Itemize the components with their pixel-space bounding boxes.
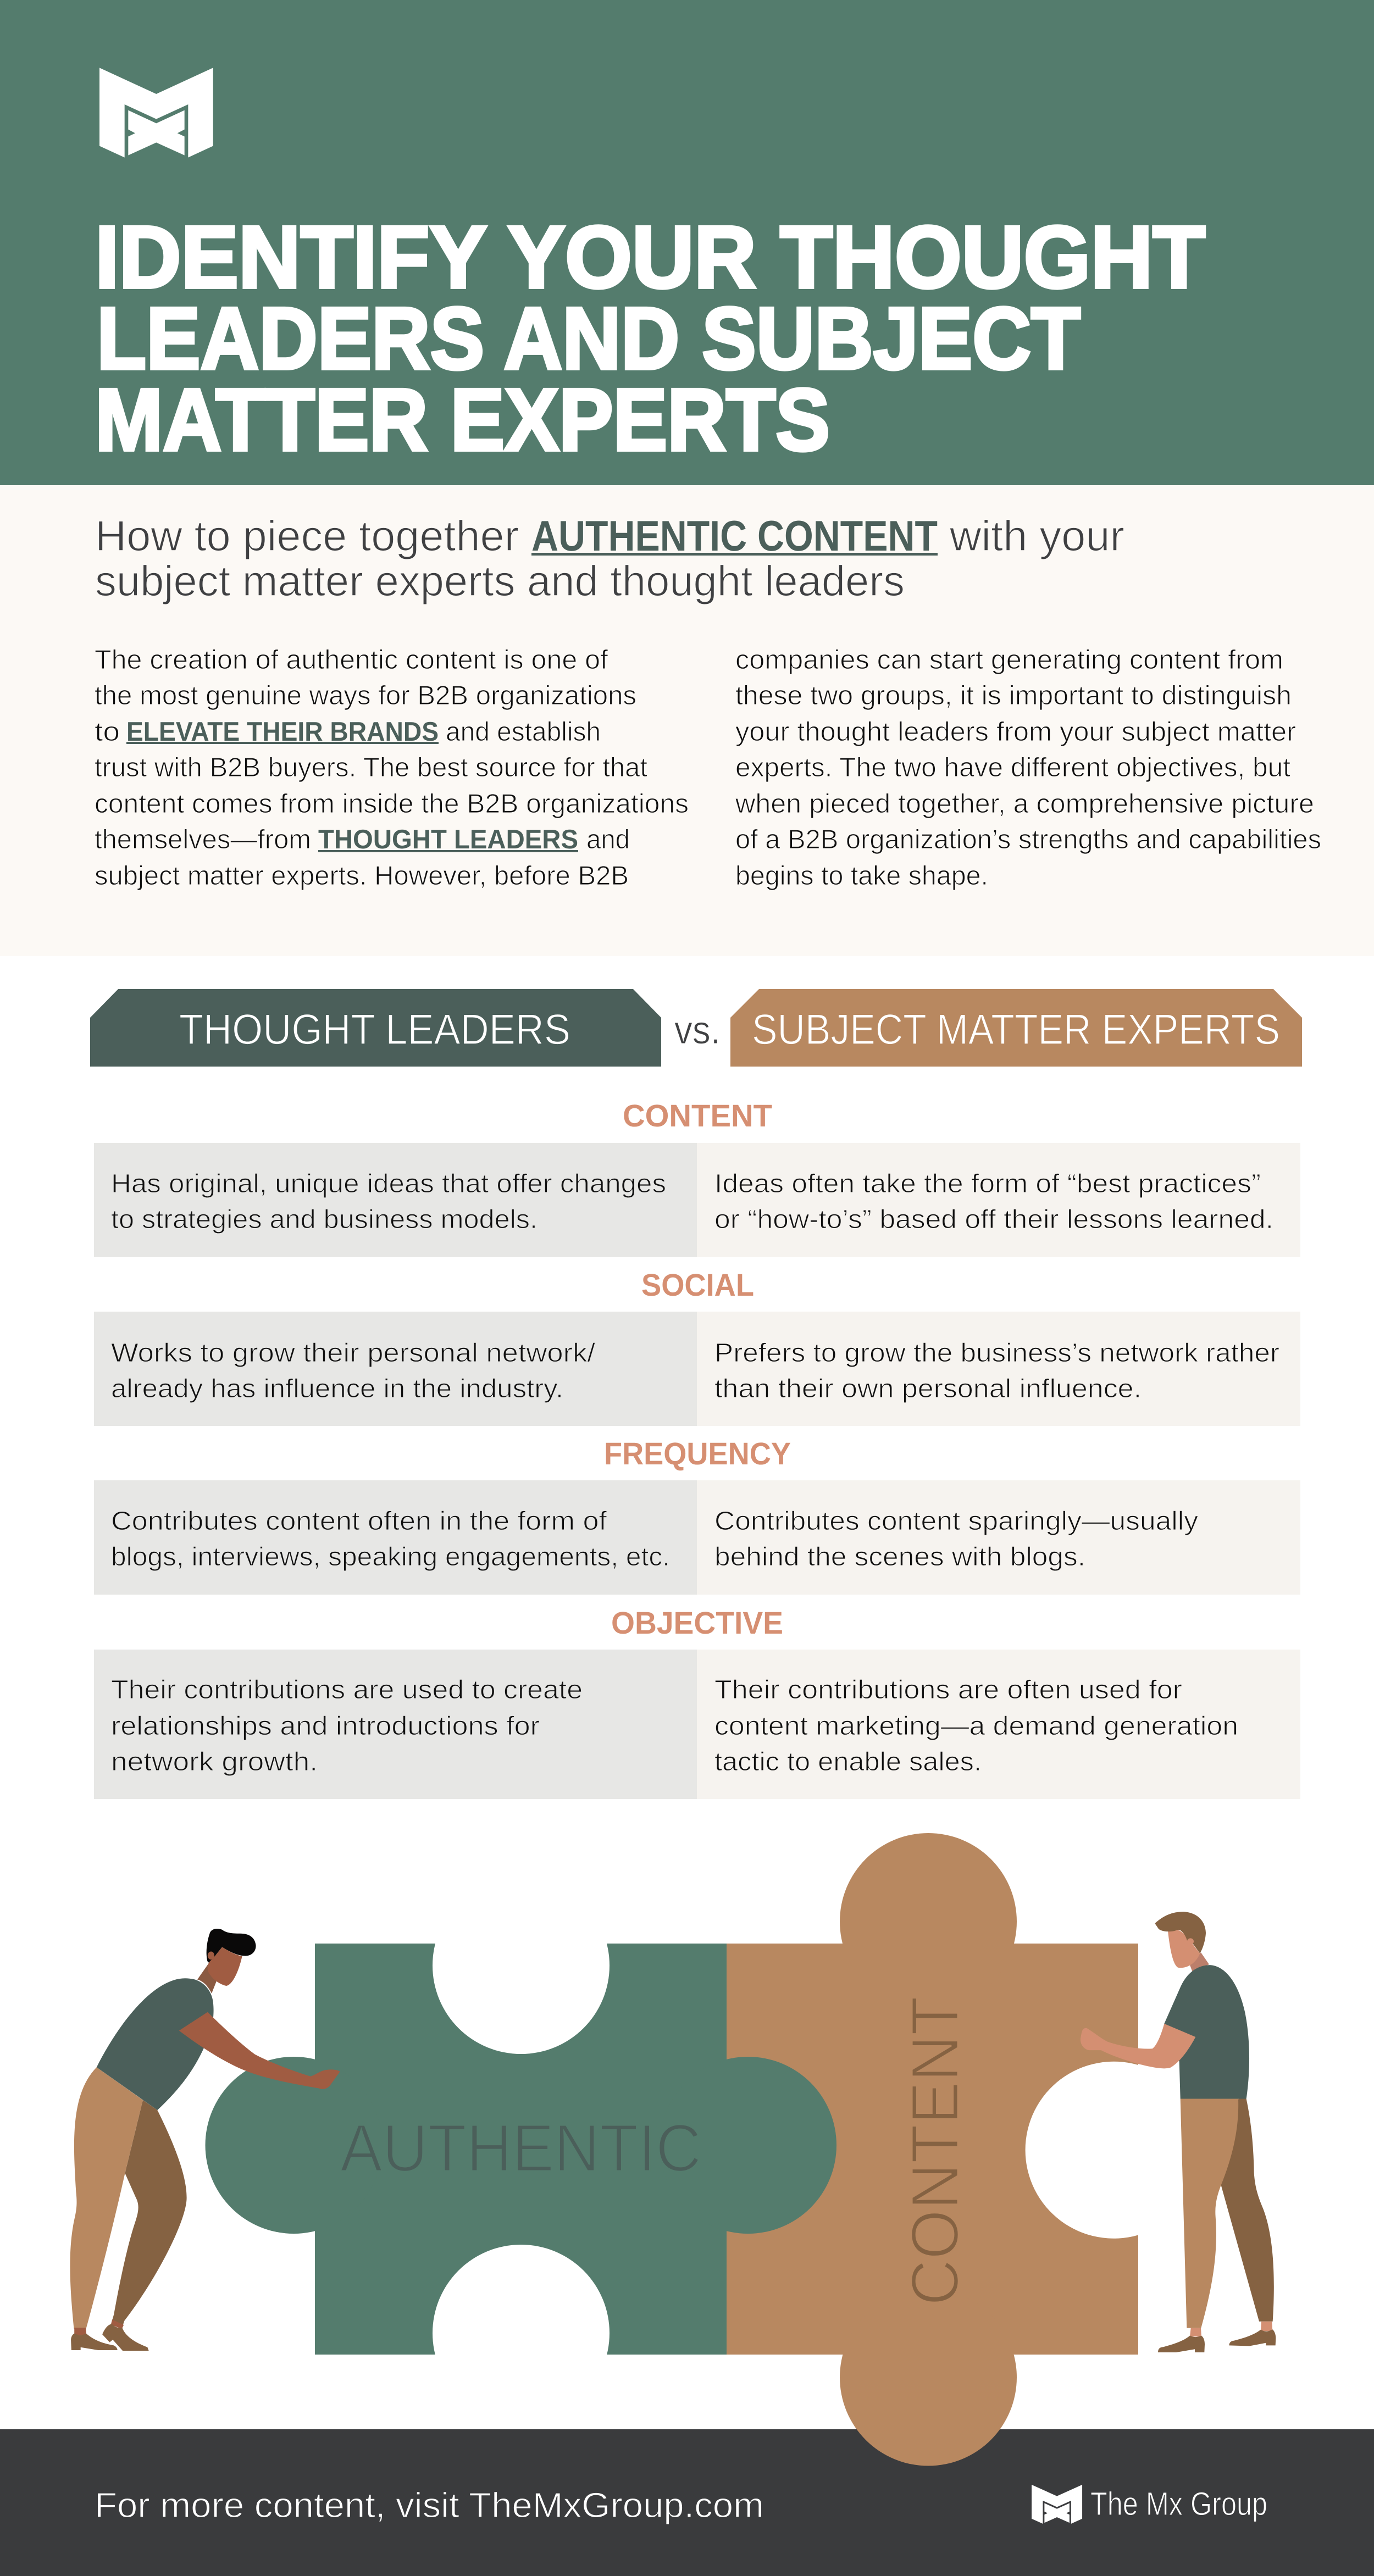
intro text: left column: themselves—from xyxy=(95,825,311,854)
intro text: right column: these two groups, it is important to distinguish xyxy=(735,681,1292,710)
row: frequency comparison: Contributes content sparingly—usually xyxy=(714,1507,1198,1536)
row: objective comparison: Their contributions are often used for xyxy=(714,1675,1182,1705)
subheading: AUTHENTIC CONTENT xyxy=(531,512,938,560)
title: IDENTIFY YOUR THOUGHT xyxy=(95,208,1205,306)
heading: frequency: FREQUENCY xyxy=(604,1436,791,1472)
subheading: with your xyxy=(949,512,1124,560)
header band xyxy=(0,0,1374,485)
intro text: right column: experts. The two have different objectives, but xyxy=(735,753,1290,782)
title: LEADERS AND SUBJECT xyxy=(97,289,1081,387)
intro text: left column: the most genuine ways for B2B organizations xyxy=(95,681,636,710)
intro text: left column xyxy=(95,645,689,891)
intro text: left column: to xyxy=(95,717,120,747)
intro text: right column: companies can start generating content from xyxy=(735,645,1283,675)
row: frequency comparison: Contributes content often in the form of xyxy=(111,1507,607,1536)
subheading xyxy=(95,512,1124,605)
row: frequency comparison: blogs, interviews, speaking engagements, etc. xyxy=(111,1542,670,1572)
puzzle piece: content: CONTENT xyxy=(897,1996,972,2306)
row: content comparison: or “how-to’s” based off their lessons learned. xyxy=(714,1205,1273,1234)
tag: subject matter experts xyxy=(730,989,1302,1067)
tag: subject matter experts: SUBJECT MATTER EXPERTS xyxy=(752,1005,1280,1053)
puzzle piece: authentic: AUTHENTIC xyxy=(340,2111,701,2185)
illustration: man pushing from the left xyxy=(70,1929,340,2351)
heading: objective: OBJECTIVE xyxy=(611,1606,783,1641)
footer logo xyxy=(1032,2485,1267,2524)
intro text: right column xyxy=(735,645,1321,891)
logo: Mx Group mark xyxy=(99,68,213,158)
row: frequency comparison xyxy=(94,1480,1300,1595)
intro text: left column: content comes from inside the B2B organizations xyxy=(95,789,689,819)
title xyxy=(95,208,1205,469)
row: social comparison: Prefers to grow the business’s network rather xyxy=(714,1339,1279,1368)
footer logo: The Mx Group xyxy=(1090,2485,1267,2522)
intro text: right column: begins to take shape. xyxy=(735,861,988,891)
intro text: left column: subject matter experts. However, before B2B xyxy=(95,861,629,891)
row: social comparison: than their own personal influence. xyxy=(714,1374,1142,1403)
intro text: left column: ELEVATE THEIR BRANDS xyxy=(126,717,439,747)
vs label: vs. xyxy=(674,1008,721,1052)
heading: social: SOCIAL xyxy=(641,1268,754,1303)
illustration: man pushing from the right xyxy=(1081,1912,1276,2352)
intro text: left column: THOUGHT LEADERS xyxy=(318,825,578,854)
row: content comparison: Ideas often take the form of “best practices” xyxy=(714,1169,1261,1198)
panel: introduction xyxy=(0,485,1374,956)
intro text: left column: The creation of authentic content is one of xyxy=(95,645,608,675)
footer band xyxy=(0,2429,1374,2576)
intro text: right column: your thought leaders from your subject matter xyxy=(735,717,1296,747)
tag: thought leaders: THOUGHT LEADERS xyxy=(179,1005,570,1053)
row: objective comparison xyxy=(94,1650,1300,1799)
row: content comparison: Has original, unique ideas that offer changes xyxy=(111,1169,666,1198)
row: objective comparison: tactic to enable sales. xyxy=(714,1747,982,1776)
intro text: right column: of a B2B organization’s strengths and capabilities xyxy=(735,825,1321,854)
intro text: left column: trust with B2B buyers. The best source for that xyxy=(95,753,647,782)
heading: content: CONTENT xyxy=(623,1098,772,1134)
intro text: left column: and establish xyxy=(446,717,601,747)
row: objective comparison: network growth. xyxy=(111,1747,318,1776)
puzzle piece: authentic xyxy=(206,1868,836,2422)
row: social comparison: Works to grow their personal network/ xyxy=(111,1339,596,1368)
subheading: How to piece together xyxy=(95,512,519,560)
subheading: subject matter experts and thought leaders xyxy=(95,557,905,605)
row: objective comparison: content marketing—a demand generation xyxy=(714,1712,1238,1741)
row: frequency comparison: behind the scenes with blogs. xyxy=(714,1542,1085,1572)
intro text: right column: when pieced together, a comprehensive picture xyxy=(735,789,1314,819)
footer call to action: For more content, visit TheMxGroup.com xyxy=(95,2485,764,2525)
row: objective comparison: Their contributions are used to create xyxy=(111,1675,583,1705)
row: social comparison: already has influence in the industry. xyxy=(111,1374,563,1403)
intro text: left column: and xyxy=(586,825,630,854)
row: social comparison xyxy=(94,1312,1300,1426)
row: objective comparison: relationships and introductions for xyxy=(111,1712,540,1741)
row: content comparison: to strategies and business models. xyxy=(111,1205,538,1234)
puzzle piece: content xyxy=(727,1833,1149,2466)
row: content comparison xyxy=(94,1143,1300,1257)
title: MATTER EXPERTS xyxy=(95,370,830,469)
tag: thought leaders xyxy=(90,989,661,1067)
